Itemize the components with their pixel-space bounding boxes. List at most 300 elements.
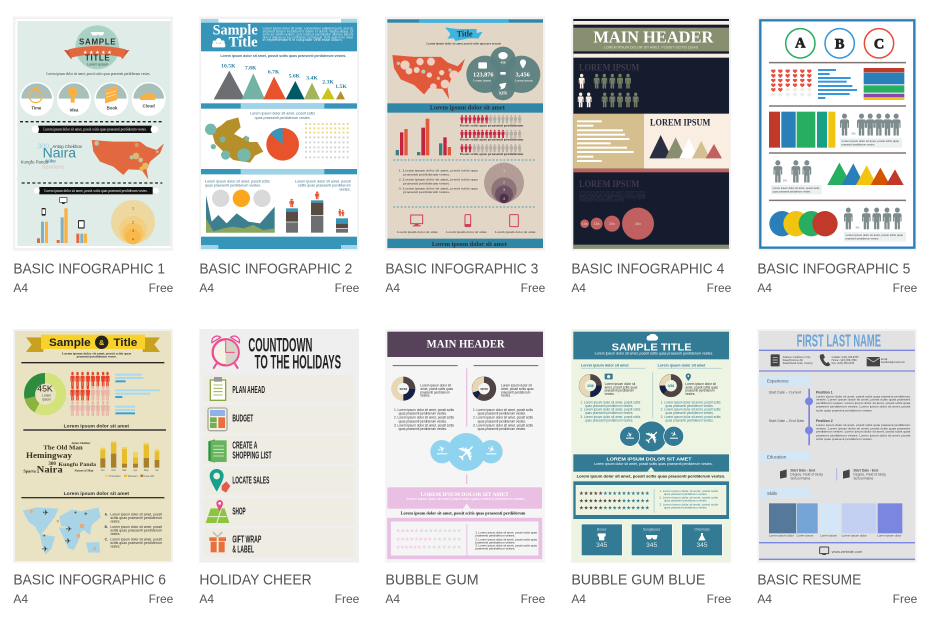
list: vestes. bbox=[110, 520, 120, 524]
right donut: 50/50 bbox=[480, 387, 488, 391]
header: MAIN HEADER bbox=[593, 28, 714, 47]
header: SAMPLE TITLE bbox=[612, 343, 692, 354]
triangles bbox=[827, 163, 904, 185]
list right bbox=[473, 408, 533, 431]
star panel: ★★★★★★ bbox=[432, 536, 462, 543]
star panel: ★★★★★ bbox=[579, 491, 603, 497]
star panel: ★★★★★★★★★★ bbox=[603, 491, 650, 497]
header: Title bbox=[229, 34, 258, 50]
left donut: amet, possit scitis quas bbox=[605, 385, 638, 389]
star panel: ★★★★★★★★★★ bbox=[603, 505, 650, 511]
stat tile: chemicals bbox=[682, 524, 722, 556]
nested circles: 3 bbox=[503, 188, 505, 192]
title badge: ★ ★ ★ ★ ★ bbox=[83, 50, 112, 56]
list: scitis quas praesenti perdiderum bbox=[110, 541, 162, 545]
icon circles: time, idea, book, cloud: Time bbox=[31, 105, 42, 110]
left donut: 50/50 bbox=[400, 387, 407, 391]
position 2 bbox=[816, 419, 911, 441]
stacked bars text: Lorem ipsum dolor sit amet, possit bbox=[295, 179, 351, 183]
star panel: 2. Lorem ipsum dolor sit amet, possit scitis bbox=[659, 496, 719, 500]
column block bbox=[769, 112, 835, 148]
title ribbon: Title bbox=[113, 337, 137, 349]
header bbox=[573, 21, 729, 58]
pictogram 1 bbox=[840, 114, 901, 136]
captions: second row: A4 bbox=[199, 592, 214, 606]
captions: first row: A4 bbox=[199, 281, 214, 295]
right donut: amet, possit scitis quas bbox=[501, 387, 534, 391]
left donut: Lorem ipsum dolor sit bbox=[420, 384, 451, 388]
row: shopping list bbox=[203, 436, 354, 464]
bold statement: Lorem ipsum dolor sit amet, possit scitis quas praesenti perdiderum bbox=[401, 511, 526, 516]
star panel: 2. Lorem ipsum dolor sit amet, possit scitis quas bbox=[475, 537, 537, 541]
row: budget bbox=[203, 405, 354, 433]
position 2: perdiderum vestes. Lorem ipsum dolor sit amet, possit scitis quas bbox=[816, 430, 911, 434]
title ribbon: & bbox=[99, 338, 105, 347]
list: Lorem ipsum dolor sit amet, possit bbox=[110, 525, 162, 529]
position 2: vestes. Lorem ipsum dolor sit amet, possit scitis quas praesent bbox=[816, 426, 911, 430]
world map: ✈ bbox=[43, 533, 47, 538]
captions: first row: A4 bbox=[571, 281, 586, 295]
left donut: vestes. bbox=[420, 394, 430, 398]
bubble scale: 40x bbox=[635, 222, 641, 226]
star panel: ★★★★★ bbox=[579, 505, 603, 511]
title badge: Lorem ipsum bbox=[87, 63, 108, 67]
list bbox=[105, 513, 162, 549]
captions: second row bbox=[13, 572, 918, 606]
star panel: ★★★★★★★★★ bbox=[579, 498, 622, 504]
captions: first row: A4 bbox=[757, 281, 772, 295]
list left: 1. Lorem ipsum dolor sit amet, possit scitis bbox=[394, 408, 454, 412]
word cloud: Anton Chekhov bbox=[71, 441, 91, 445]
timeline bbox=[769, 389, 813, 445]
left donut: 4/36 bbox=[587, 384, 594, 388]
footer band bbox=[387, 239, 543, 248]
word cloud: The Old Man bbox=[43, 444, 83, 451]
donut chart: ipsum bbox=[42, 397, 51, 401]
lists: quas praesenti perdiderum vestes. bbox=[665, 404, 714, 408]
skills blocks: Lorem ipsum dolor bbox=[769, 533, 794, 537]
left donut: praesenti perdiderum bbox=[605, 389, 634, 393]
divider band bbox=[201, 169, 357, 174]
US map with bubbles bbox=[392, 55, 465, 99]
US map bbox=[92, 140, 164, 179]
stacked block bbox=[864, 68, 904, 100]
education entries bbox=[780, 468, 886, 481]
captions: first row: Free bbox=[149, 281, 174, 295]
numbered list: 2. Lorem ipsum dolor sit amet, possit scitis quas bbox=[399, 178, 479, 183]
word cloud: 300 bbox=[37, 144, 49, 151]
timeline: Start Date – Current bbox=[769, 390, 801, 394]
bars panel bbox=[573, 114, 644, 169]
star panel bbox=[389, 520, 540, 557]
pictograms bbox=[578, 74, 639, 107]
contact row: Address 1 Address 2 City bbox=[783, 356, 811, 359]
lists: quas praesenti perdiderum vestes. bbox=[665, 418, 714, 422]
world map: ✈ bbox=[43, 508, 49, 517]
card: Basic Infographic 5 bbox=[757, 17, 917, 251]
website footer: www.website.com bbox=[832, 550, 863, 554]
nested circles: 2 bbox=[503, 181, 505, 185]
title: COUNTDOWN bbox=[248, 336, 312, 357]
star panel: praesenti perdiderum vestes. bbox=[475, 547, 515, 551]
world map: ✈ bbox=[65, 536, 71, 545]
star panel: quas praesenti perdiderum vestes. bbox=[664, 492, 707, 496]
captions: first row: Free bbox=[893, 281, 918, 295]
tag: experience bbox=[759, 376, 812, 385]
list: scitis quas praesenti perdiderum bbox=[110, 528, 162, 532]
bubble scale: 15x bbox=[594, 222, 600, 226]
stat tile: boxes: 345 bbox=[596, 542, 608, 549]
triangle chart: 10.5K bbox=[221, 63, 236, 69]
tag: education bbox=[759, 451, 812, 461]
plane circles: ✈ bbox=[436, 443, 448, 456]
icon circles: time, idea, book, cloud: Idea bbox=[70, 107, 79, 112]
word cloud: Nike bbox=[46, 158, 56, 164]
blue bars bbox=[818, 69, 857, 99]
left donut: praesenti perdiderum bbox=[420, 390, 450, 394]
right donut: vestes. bbox=[685, 392, 695, 396]
device icons: Lorem ipsum dolor sit amet. bbox=[397, 230, 439, 234]
legend: Promotion bbox=[109, 475, 121, 478]
star panel: ★★★★★ bbox=[396, 528, 419, 535]
header: Lorem ipsum dolor sit amet, possit scitis quas praesenti perdiderum vestes. bbox=[595, 351, 713, 355]
position 1 bbox=[816, 390, 911, 412]
word cloud: Kungfu Panda bbox=[21, 160, 49, 165]
triangle chart: 7.8K bbox=[245, 65, 257, 71]
ABC circles: A bbox=[795, 35, 806, 51]
header bbox=[201, 19, 357, 51]
triangle chart bbox=[214, 63, 347, 99]
tag: skills bbox=[759, 488, 812, 498]
captions: second row: HOLIDAY CHEER bbox=[199, 572, 312, 588]
triangle panel: LOREM IPSUM bbox=[650, 117, 711, 127]
world map bbox=[23, 507, 101, 555]
right donut: amet, possit scitis quas bbox=[685, 385, 718, 389]
list: C. bbox=[105, 538, 108, 542]
education entries: School Name bbox=[853, 477, 873, 481]
numbered list bbox=[399, 169, 479, 194]
captions: second row: BASIC RESUME bbox=[757, 572, 862, 588]
header: in reprehenderit in voluptate velit esse cillum. bbox=[263, 38, 343, 42]
position 1: perdiderum vestes. Lorem ipsum dolor sit amet, possit scitis quas bbox=[816, 401, 911, 405]
hearts bbox=[771, 69, 812, 97]
row: shop bbox=[203, 498, 354, 526]
triangle chart: 5.6K bbox=[289, 74, 301, 80]
left donut: vestes. bbox=[605, 392, 615, 396]
caption 2: Lorem ipsum dolor sit amet, possit scitis bbox=[773, 186, 820, 190]
stat bubbles: 123,876 bbox=[473, 71, 494, 78]
Canada map bbox=[205, 117, 263, 163]
caption 3: Lorem ipsum dolor sit amet, possit scitis quas bbox=[846, 233, 904, 237]
list right: 1. Lorem ipsum dolor sit amet, possit scitis bbox=[473, 408, 533, 412]
list left bbox=[394, 408, 454, 431]
heading: LOREM IPSUM bbox=[579, 62, 640, 72]
list: vestes. bbox=[110, 545, 120, 549]
row: plan ahead bbox=[203, 375, 354, 402]
band: LOREM IPSUM DOLOR SIT AMET bbox=[606, 457, 691, 463]
stat bubbles: Lorem ipsum bbox=[515, 79, 533, 83]
pictogram 1: 5% bbox=[852, 132, 856, 136]
area chart bbox=[206, 195, 275, 233]
star panel: 1. Lorem ipsum dolor sit amet, possit scitis bbox=[659, 489, 719, 493]
nested circles: 1 bbox=[503, 169, 505, 173]
ABC circles: B bbox=[835, 37, 845, 53]
captions: second row: Free bbox=[335, 592, 360, 606]
area chart text: quas praesenti perdiderum vestes. bbox=[205, 183, 261, 187]
list left: quas praesenti perdiderum vestes. bbox=[399, 419, 447, 423]
lists: 2. Lorem ipsum dolor sit amet, possit scitis bbox=[661, 408, 721, 412]
header bbox=[573, 332, 729, 359]
card: Bubble Gum bbox=[385, 329, 545, 563]
lists: 1. Lorem ipsum dolor sit amet, possit scitis bbox=[661, 401, 721, 405]
horizontal bars bbox=[115, 374, 160, 414]
card: Basic Infographic 4 bbox=[571, 17, 731, 251]
captions: second row: A4 bbox=[757, 592, 772, 606]
row: locate sales bbox=[203, 466, 354, 495]
captions: second row: A4 bbox=[385, 592, 400, 606]
list left: 2. Lorem ipsum dolor sit amet, possit scitis bbox=[394, 416, 454, 420]
title ribbon: Sample bbox=[49, 337, 91, 349]
skills blocks: Lorem ipsum bbox=[820, 533, 838, 537]
triangle chart: 3.4K bbox=[306, 76, 318, 82]
divider band bbox=[201, 103, 357, 109]
lower heading and text: LOREM IPSUM DOLOR SIT AMET, POSSIT SCITIS bbox=[579, 191, 645, 195]
nested circles: 2 bbox=[132, 221, 134, 225]
lists bbox=[580, 401, 721, 422]
numbered list: praesenti perdiderum vestes. bbox=[403, 172, 450, 176]
row: shop: SHOP bbox=[232, 506, 246, 517]
bubble scale: 10x bbox=[582, 222, 588, 226]
plane circles bbox=[430, 433, 503, 471]
stacked bars text: vestes. bbox=[339, 187, 351, 191]
donut chart: Lorem bbox=[42, 393, 52, 397]
word cloud: 300 bbox=[48, 462, 56, 467]
stacked bar chart: Mar bbox=[122, 469, 127, 472]
triangle chart: 6.7K bbox=[268, 70, 280, 76]
captions: first row: A4 bbox=[13, 281, 28, 295]
right donut: Lorem ipsum dolor sit bbox=[685, 382, 716, 386]
captions: second row: BUBBLE GUM BLUE bbox=[571, 572, 706, 588]
captions: first row: BASIC INFOGRAPHIC 3 bbox=[385, 261, 538, 277]
position 2: scitis quas praesent perdiderum vestes. bbox=[816, 437, 873, 441]
contact row: Fax: (123) 456-0978 bbox=[832, 362, 855, 365]
word cloud: Future of Man bbox=[75, 468, 94, 472]
plane circles: ✈ bbox=[625, 430, 634, 440]
row: shopping list: CREATE A bbox=[232, 440, 257, 451]
pictogram grid bbox=[70, 372, 110, 416]
card: Basic Infographic 6 bbox=[13, 329, 173, 563]
title ribbon bbox=[426, 27, 502, 45]
stacked bars bbox=[286, 191, 348, 233]
bar chart bbox=[396, 119, 451, 155]
numbered list: praesenti perdiderum vestes. bbox=[403, 190, 450, 194]
education entries: School Name bbox=[790, 477, 810, 481]
stat bubbles: 456 bbox=[500, 61, 506, 65]
tag: skills: Skills bbox=[767, 491, 777, 496]
stacked bars text bbox=[295, 179, 351, 191]
pink band bbox=[387, 487, 542, 509]
title ribbon bbox=[26, 335, 160, 352]
pictogram rows bbox=[460, 115, 524, 156]
card: Basic Infographic 1 bbox=[13, 17, 173, 251]
header: Sample bbox=[213, 22, 258, 38]
education entries: Start Date - End bbox=[790, 468, 815, 472]
section heading: Lorem ipsum dolor sit amet bbox=[64, 491, 129, 497]
pictogram 2: 5% bbox=[783, 178, 787, 182]
captions: second row: BUBBLE GUM bbox=[385, 572, 479, 588]
pink band: Lorem ipsum dolor sit amet, possit scitis quas praesenti perdiderum vestes. bbox=[407, 497, 525, 501]
lists: 2. Lorem ipsum dolor sit amet, possit scitis bbox=[580, 408, 641, 412]
position 1: Lorem ipsum dolor sit amet, possit scitis quas praesent perdiderum bbox=[816, 394, 911, 398]
area chart text bbox=[205, 179, 270, 187]
pictogram rows: Possit scitis quas praesenti perdiderum bbox=[460, 138, 524, 142]
pictogram rows: Possit scitis quas praesenti perdiderum bbox=[460, 123, 524, 127]
pie chart bbox=[266, 128, 299, 161]
nested circles: 1 bbox=[132, 207, 134, 211]
bold statement: Lorem ipsum dolor sit amet, possit scitis quas praesenti perdiderum vestes. bbox=[577, 475, 725, 479]
contact row: State/Province Zip bbox=[783, 359, 804, 362]
caption 1 bbox=[840, 138, 902, 148]
contact row: State/Postal Code, Country bbox=[783, 362, 814, 365]
card: Holiday Cheer bbox=[199, 329, 359, 563]
list right: 3. Lorem ipsum dolor sit amet, possit scitis bbox=[473, 423, 533, 427]
star panel: ★★★★★★★★ bbox=[422, 544, 462, 551]
stacked bar chart: Feb bbox=[112, 470, 116, 472]
caption 2 bbox=[771, 185, 822, 194]
list right: quas praesenti perdiderum vestes. bbox=[478, 427, 526, 431]
timeline: Start Date – End Date bbox=[769, 419, 805, 423]
contact row: Email: bbox=[881, 358, 888, 361]
star panel: praesenti perdiderum vestes. bbox=[475, 540, 515, 544]
left donut bbox=[394, 377, 453, 401]
captions: first row: BASIC INFOGRAPHIC 2 bbox=[199, 261, 352, 277]
row: plan ahead: PLAN AHEAD bbox=[232, 385, 265, 396]
list: vestes. bbox=[110, 532, 120, 536]
header: LOREM IPSUM DOLOR SIT AMET, POSSIT SCITIS QUAS bbox=[604, 46, 699, 50]
pictogram 2 bbox=[773, 160, 811, 183]
star panel: ★★★★★★★★ bbox=[396, 536, 432, 543]
position 2: Lorem ipsum dolor sit amet, possit scitis quas praesent perdiderum bbox=[816, 423, 911, 427]
banner 1: Lorem ipsum dolor sit amet, possit scitis quas praesenti perdiderum vestes. bbox=[43, 128, 147, 133]
stat tile: chemicals: 345 bbox=[696, 542, 708, 549]
captions: first row: BASIC INFOGRAPHIC 4 bbox=[571, 261, 724, 277]
lower heading and text: PRAESENTI PERDIDERUM VESTES bbox=[579, 199, 624, 203]
stacked bar chart: Jan bbox=[101, 470, 105, 472]
legend: Free Gift bbox=[144, 475, 154, 478]
word cloud: Hemingway bbox=[26, 451, 73, 460]
row: locate sales: LOCATE SALES bbox=[232, 476, 269, 487]
nested circles: 4 bbox=[132, 238, 134, 242]
subtitle: Lorem ipsum dolor sit amet, possit scitis quas praesenti perdiderum vestes. bbox=[46, 72, 150, 77]
list right: quas praesenti perdiderum vestes. bbox=[478, 412, 526, 416]
title badge bbox=[64, 25, 129, 69]
captions: first row: BASIC INFOGRAPHIC 1 bbox=[13, 261, 165, 277]
word cloud: Anton Chekhov bbox=[52, 144, 83, 149]
skills blocks: Lorem ipsum bbox=[797, 533, 814, 537]
title ribbon: Title bbox=[457, 30, 473, 39]
plane circles bbox=[620, 421, 684, 452]
contact row: Cellular: (123) 345-6789 bbox=[832, 356, 859, 359]
stat tile: boxes: Boxes bbox=[597, 528, 607, 532]
row: gift wrap: GIFT WRAP bbox=[232, 534, 261, 545]
stacked bar chart: Jun bbox=[155, 470, 160, 472]
card: Bubble Gum Blue bbox=[571, 329, 731, 563]
alarm clock icon bbox=[212, 336, 239, 369]
icon circles: time, idea, book, cloud: Book bbox=[107, 105, 118, 110]
contact row bbox=[771, 354, 905, 366]
overlapping circles bbox=[769, 211, 838, 236]
word cloud: Naira bbox=[43, 144, 76, 160]
lists: 3. Lorem ipsum dolor sit amet, possit scitis bbox=[661, 415, 721, 419]
header: MAIN HEADER bbox=[427, 338, 505, 351]
caption 3: praesenti perdiderum vestes. bbox=[846, 236, 879, 240]
position 1: praesent perdiderum vestes. Lorem ipsum dolor sit amet, possit bbox=[816, 405, 911, 409]
lower heading and text: QUAS PRAESENTI PERDIDERUM VESTES. LOREM bbox=[579, 193, 646, 197]
subtitle bbox=[62, 351, 132, 358]
tag: experience: Experience bbox=[767, 379, 789, 384]
band: Lorem ipsum dolor sit amet, possit scitis quas praesenti perdiderum vestes. bbox=[594, 462, 713, 466]
stat tile: sunglasses: Sunglasses bbox=[643, 528, 661, 532]
plane circles: ✈ bbox=[639, 423, 666, 451]
title badge: SAMPLE bbox=[79, 37, 116, 46]
lists: quas praesenti perdiderum vestes. bbox=[585, 404, 633, 408]
banner 2 bbox=[34, 187, 159, 194]
numbered list: 1. Lorem ipsum dolor sit amet, possit scitis quas bbox=[399, 169, 479, 174]
star panel: 1. Lorem ipsum dolor sit amet, possit scitis quas bbox=[475, 530, 537, 534]
captions: second row: Free bbox=[521, 592, 546, 606]
stacked bar chart: May bbox=[144, 470, 149, 472]
icon circles: time, idea, book, cloud bbox=[20, 82, 166, 116]
caption 1: praesenti perdiderum vestes. bbox=[842, 142, 875, 146]
lists: quas praesenti perdiderum vestes. bbox=[585, 411, 633, 415]
position 2: praesent perdiderum vestes. Lorem ipsum dolor sit amet, possit bbox=[816, 433, 911, 437]
education entries: Degree, Field of study bbox=[790, 473, 823, 477]
captions: first row bbox=[13, 261, 918, 295]
stacked bars text: scitis quas praesenti perdiderum bbox=[298, 183, 351, 187]
triangle chart: 1.5K bbox=[335, 84, 347, 90]
position 1: vestes. Lorem ipsum dolor sit amet, possit scitis quas praesent bbox=[816, 398, 911, 402]
nested circles bbox=[111, 200, 155, 244]
footer band: Lorem ipsum dolor sit amet bbox=[432, 241, 508, 248]
legend: Discount bbox=[128, 475, 138, 478]
title ribbon: Lorem ipsum dolor sit amet, possit scitis quas pro erroris bbox=[426, 41, 502, 45]
banner 1 bbox=[32, 126, 158, 133]
world map: ✈ bbox=[66, 524, 72, 533]
lower heading and text: IPSUM DOLOR SIT AMET, POSSIT SCITIS QUAS bbox=[579, 196, 645, 200]
nested circles: 3 bbox=[132, 229, 134, 233]
header: eiusmod tempor incididunt ut labore et dolore magna aliqua. Ut bbox=[263, 29, 353, 33]
header bbox=[387, 332, 543, 357]
row: budget: BUDGET bbox=[232, 414, 253, 425]
row: gift wrap: & LABEL bbox=[232, 545, 254, 556]
pictogram 3 bbox=[844, 208, 902, 229]
star panel: 3. Lorem ipsum dolor sit amet, possit scitis quas bbox=[475, 544, 537, 548]
stat tile: sunglasses: 345 bbox=[646, 542, 658, 549]
band heading: Lorem ipsum dolor sit amet bbox=[430, 104, 506, 111]
stat bubbles bbox=[466, 47, 540, 100]
word cloud bbox=[23, 441, 97, 476]
donut chart: 45K bbox=[37, 384, 53, 394]
word cloud: Spartans bbox=[42, 165, 64, 171]
numbered list: 3. Lorem ipsum dolor sit amet, possit scitis quas bbox=[399, 186, 479, 191]
word cloud: Kungfu Panda bbox=[58, 463, 97, 468]
left donut bbox=[579, 374, 638, 397]
triangle panel bbox=[644, 114, 729, 169]
card: Holiday Cheer: TO THE HOLIDAYS bbox=[255, 352, 341, 373]
header: nisi ut aliquip ex ea commodo consequat. Duis aute irure dolor bbox=[263, 35, 353, 39]
subheading: Lorem ipsum dolor sit amet, possit scitis quas praesenti perdiderum vestes. bbox=[220, 54, 346, 58]
captions: first row: Free bbox=[521, 281, 546, 295]
